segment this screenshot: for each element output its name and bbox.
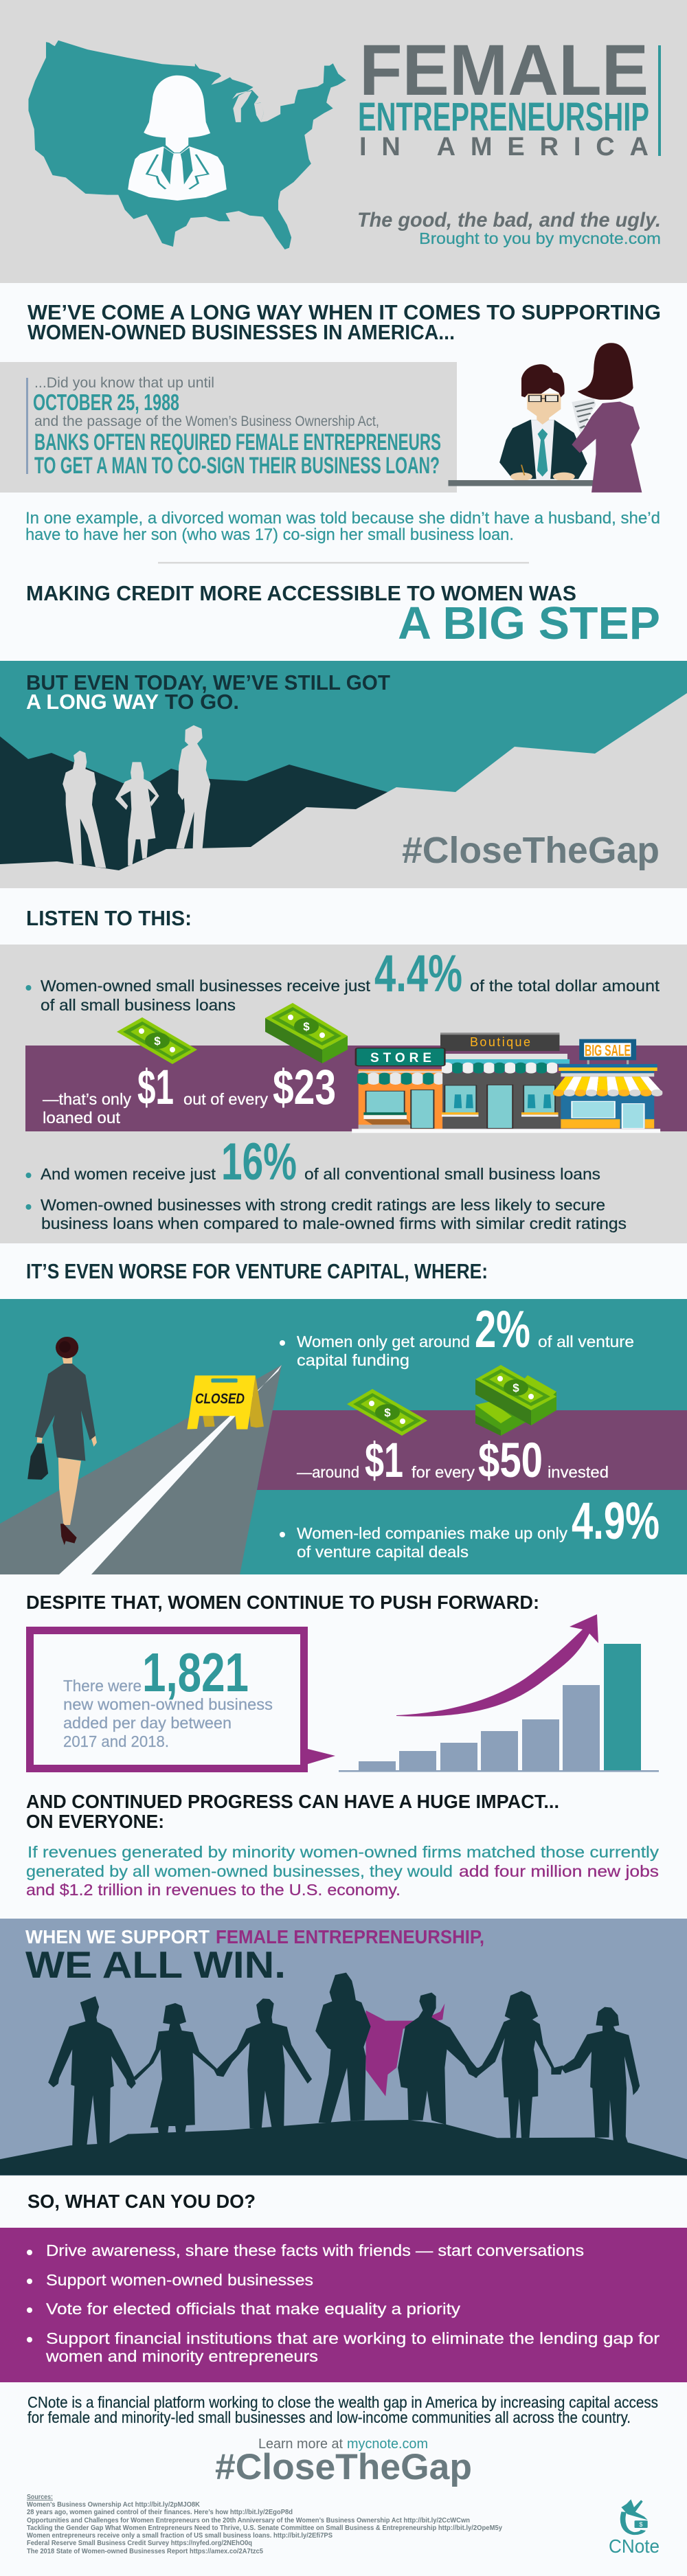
text: did you know: TO GET A MAN TO CO-SIGN THEIR BUSINESS LOAN? [34,453,440,479]
heading: a big step: A BIG STEP [398,598,660,649]
text: did you know: Women’s Business Ownership Act, [185,414,379,429]
panel: one dollar out of 23: out of every [183,1090,269,1108]
text: divorced woman example [25,509,660,544]
bullet list: Vote for elected officials that make equality a priority [46,2300,461,2318]
stat: 2 percent [280,1300,634,1369]
stat: one dollar for every 50: invested [548,1463,609,1481]
heading: what can you do: SO, WHAT CAN YOU DO? [27,2191,256,2212]
heading: come a long way: WE’VE COME A LONG WAY WHEN IT COMES TO SUPPORTING [27,300,661,324]
panel: we all win [0,1919,687,2176]
road [0,1365,282,1574]
text: did you know [33,375,441,479]
text: revenue impact: generated by all women-owned businesses, they would [26,1862,453,1880]
text: about CNote: for female and minority-led small businesses and low-income communities all across the country. [27,2408,631,2426]
icon: closed sign [187,1375,264,1430]
panel: header [0,0,687,283]
stat: one dollar for every 50: for every [412,1463,475,1481]
text: revenue impact [26,1843,660,1899]
icon: dollar bill: $ [154,1035,161,1048]
text: did you know: OCTOBER 25, 1988 [33,389,179,415]
panel: venture capital [0,1299,687,1574]
illustration: businesswoman walking [27,1337,97,1545]
icon: dollar bill: $ [384,1406,391,1419]
silhouettes: three people on mountain [63,725,210,868]
text: learn more: Learn more at [258,2437,343,2452]
stat: 4.4 percent: 4.4% [374,945,462,1003]
bullet list [27,2241,660,2365]
text: revenue impact: and $1.2 trillion in revenues to the U.S. economy. [26,1881,401,1899]
stat: 2 percent: of all venture [538,1333,634,1351]
stat: 2 percent: capital funding [297,1351,409,1369]
stat: one dollar for every 50: $50 [478,1434,543,1488]
text: learn more: mycnote.com [347,2437,428,2452]
stat: 16 percent [26,1133,600,1191]
stat: 4.9 percent [280,1492,660,1561]
sources: Women’s Business Ownership Act http://bit.ly/2pMJO8K [27,2501,201,2509]
logo: CNote: $ [639,2521,643,2528]
stat: 4.4 percent [26,945,660,1014]
callout: new businesses per day [30,1631,335,1768]
stat: 16 percent: of all conventional small business loans [304,1165,600,1183]
heading: venture capital: IT’S EVEN WORSE FOR VENTURE CAPITAL, WHERE: [26,1259,488,1283]
callout: new businesses per day: 1,821 [142,1642,249,1703]
panel: one dollar out of 23 [25,1046,687,1131]
heading: come a long way: WOMEN-OWNED BUSINESSES IN AMERICA... [27,320,455,344]
panel: one dollar out of 23: loaned out [43,1109,121,1127]
stat: 4.9 percent: Women-led companies make up only [297,1524,568,1542]
heading: a big step: MAKING CREDIT MORE ACCESSIBLE TO WOMEN WAS [26,581,576,605]
bullet list: Support women-owned businesses [46,2271,313,2289]
text: about CNote [27,2393,658,2426]
text: divorced woman example: In one example, a divorced woman was told because she didn’t have a husband, she’d [25,509,660,528]
icon: pile of money: $ [513,1381,519,1394]
stat: 4.4 percent: of the total dollar amount [470,977,660,995]
illustration: storefronts: STORE [370,1051,431,1065]
bullet list: women and minority entrepreneurs [45,2347,318,2365]
text: did you know: BANKS OFTEN REQUIRED FEMALE ENTREPRENEURS [34,429,441,455]
panel: one dollar out of 23: —that’s only [43,1090,132,1108]
tagline: Brought to you by mycnote.com [419,229,661,247]
tagline [357,209,661,247]
sources: Opportunities and Challenges for Women Entrepreneurs on the 20th Anniversary of the Women’s Business Ownership Act http://bit.ly/2CcWCwn [27,2517,470,2524]
sources: Sources: [27,2494,53,2501]
text: learn more [258,2437,428,2452]
bar chart: growth [339,1644,659,1772]
illustration: storefronts: Boutique [470,1035,530,1049]
icon: pile of money [475,1365,556,1436]
illustration: banker and female entrepreneur [448,343,642,493]
sources [27,2494,502,2555]
icon: stack of money [265,1003,348,1063]
callout: new businesses per day: There were [63,1677,142,1695]
heading: but even today [26,670,390,714]
illustration: storefronts [352,1032,662,1133]
sources: The 2018 State of Women-owned Businesses Report https://amex.co/2A7tzc5 [27,2548,263,2555]
bullet list: Support financial institutions that are working to eliminate the lending gap for [46,2329,660,2347]
icon: stack of money: $ [303,1020,310,1033]
text: credit ratings: business loans when compared to male-owned firms with similar credit ratings [41,1214,627,1232]
callout: new businesses per day: new women-owned business [63,1695,273,1713]
tagline: The good, the bad, and the ugly. [357,209,661,231]
heading: but even today: BUT EVEN TODAY, WE’VE STILL GOT [26,670,390,694]
hashtag: close the gap: #CloseTheGap [402,830,660,871]
title: IN AMERICA [359,133,649,161]
stat: one dollar for every 50: $1 [365,1434,403,1488]
stat: one dollar for every 50 [297,1434,609,1488]
heading: we all win [25,1926,484,1986]
heading: huge impact: ON EVERYONE: [26,1811,164,1832]
panel: what you can do [0,2228,687,2382]
heading: huge impact: AND CONTINUED PROGRESS CAN HAVE A HUGE IMPACT... [26,1791,559,1812]
heading: we all win: WHEN WE SUPPORT [25,1926,210,1947]
mountains [0,693,687,888]
title [358,30,661,161]
stat: 16 percent: And women receive just [41,1165,216,1183]
title: FEMALE [359,30,649,111]
logo: CNote: CNote [609,2535,660,2557]
sources: Federal Reserve Small Business Credit Survey https://nyfed.org/2NEhO0q [27,2540,252,2547]
sources: Women entrepreneurs receive only a small fraction of US small business loans. http://bit.ly/2Efi7PS [27,2532,333,2540]
panel: did you know [0,362,457,493]
icon: US map with businesswoman [28,41,346,249]
stat: 16 percent: 16% [221,1133,297,1191]
text: divorced woman example: have to have her son (who was 17) co-sign her small business loan. [25,526,514,544]
arrow: upward growth [396,1614,598,1717]
panel: one dollar out of 23: $1 [137,1061,174,1115]
stat: one dollar for every 50: —around [297,1463,359,1481]
heading: but even today: TO GO. [165,690,239,714]
text: credit ratings: Women-owned businesses with strong credit ratings are less likely to secure [41,1196,605,1214]
heading: push forward: DESPITE THAT, WOMEN CONTINUE TO PUSH FORWARD: [26,1592,539,1613]
illustration: storefronts: BIG SALE [585,1041,631,1059]
heading: come a long way [27,300,661,344]
icon: dollar bill [117,1017,197,1064]
stat: 4.4 percent: Women-owned small businesses receive just [41,977,371,995]
stat: 4.9 percent: of venture capital deals [297,1543,469,1561]
text: revenue impact: If revenues generated by minority women-owned firms matched those currently [27,1843,660,1861]
sources: Tackling the Gender Gap What Women Entrepreneurs Need to Thrive, U.S. Senate Committee on Small Business & Entrepreneurship http://bit.ly/2OpeM5y [27,2524,502,2532]
heading: we all win: WE ALL WIN. [25,1943,286,1986]
panel: long way to go [0,661,687,888]
stat: 2 percent: 2% [475,1300,530,1359]
hashtag: close the gap: #CloseTheGap [215,2447,472,2487]
callout: new businesses per day: added per day between [63,1714,232,1732]
text: did you know: ...Did you know that up until [34,375,214,391]
text: credit ratings [26,1196,627,1232]
heading: huge impact [26,1791,559,1832]
heading: but even today: A LONG WAY [26,690,159,714]
sources: 28 years ago, women gained control of their finances. Here’s how http://bit.ly/2EgoP8d [27,2509,293,2516]
text: did you know: and the passage of the [34,414,182,429]
heading: listen to this: LISTEN TO THIS: [26,906,192,930]
silhouettes: people holding hands with cape [0,1973,687,2176]
bullet list: Drive awareness, share these facts with friends — start conversations [46,2241,584,2259]
callout: new businesses per day: 2017 and 2018. [63,1732,169,1750]
heading: a big step [26,581,660,649]
stat: 2 percent: Women only get around [297,1333,470,1351]
logo: CNote [609,2499,660,2557]
text: revenue impact: add four million new jobs [459,1862,659,1880]
stat: 4.4 percent: of all small business loans [41,996,236,1014]
heading: we all win: FEMALE ENTREPRENEURSHIP, [216,1926,484,1947]
panel: small business loans [0,945,687,1243]
panel: one dollar out of 23: $23 [273,1061,336,1115]
icon: closed sign: CLOSED [195,1391,245,1407]
icon: dollar bill [347,1389,427,1436]
